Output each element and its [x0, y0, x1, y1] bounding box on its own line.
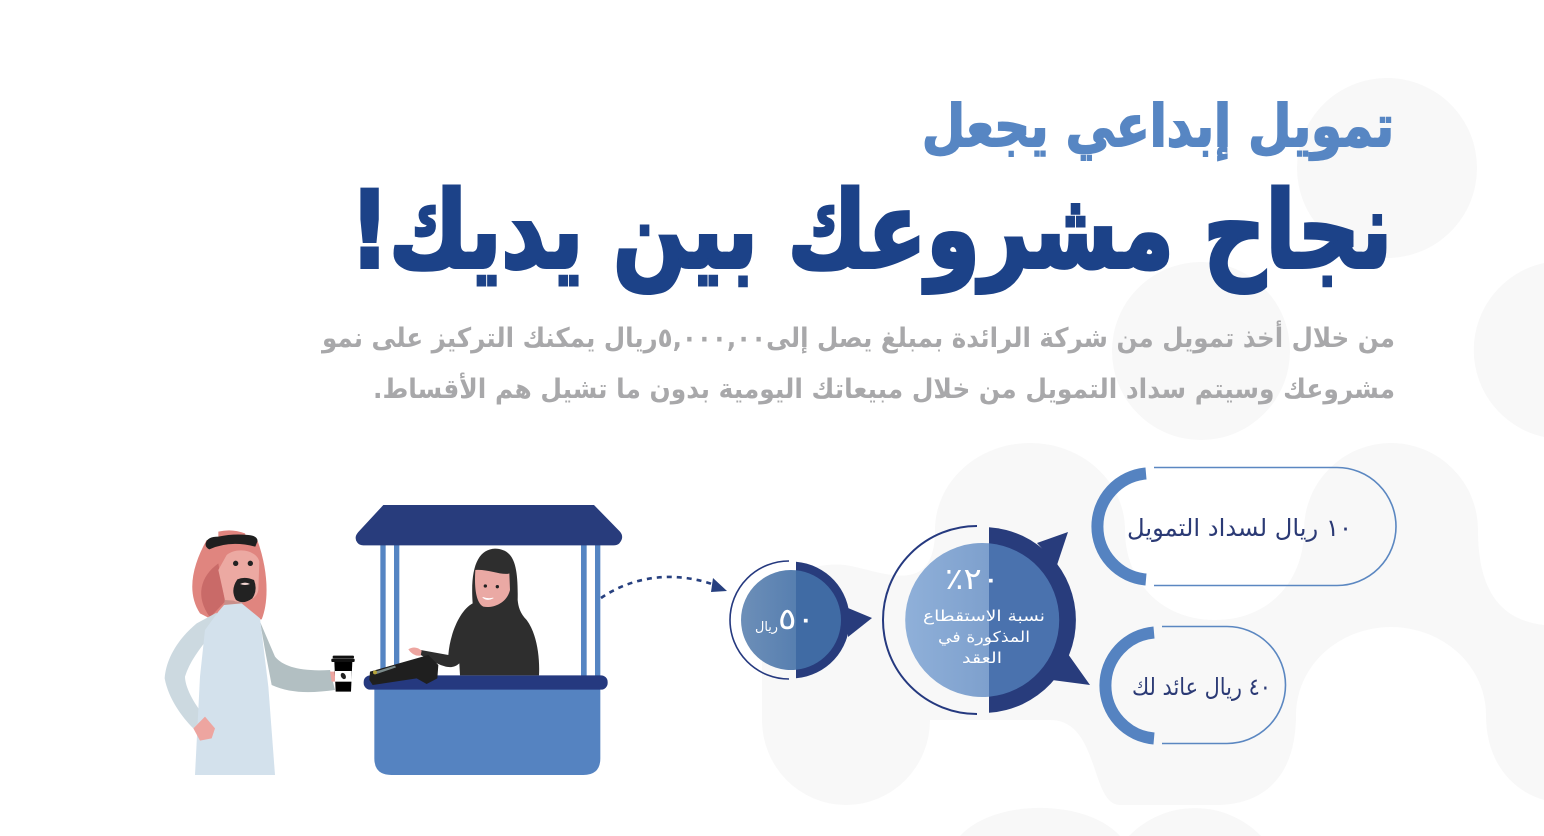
big circle: 20 percent deduction: العقد [962, 649, 1002, 667]
background pattern [762, 78, 1544, 836]
description paragraph: مشروعك وسيتم سداد التمويل من خلال مبيعاتك اليومية بدون ما تشيل هم الأقساط. [373, 372, 1395, 405]
pill: 40 riyals return [1105, 626, 1286, 744]
dotted arrow [601, 577, 727, 598]
pill: 10 riyals for repayment [1097, 468, 1396, 586]
icon: shop assistant [408, 549, 539, 675]
small circle: 50 riyals: ريال [755, 620, 778, 635]
description paragraph: من خلال أخذ تمويل من شركة الرائدة بمبلغ يصل إلى٥,٠٠٠,٠٠ريال يمكنك التركيز على نمو [320, 320, 1395, 354]
big circle: 20 percent deduction: المذكورة في [938, 628, 1030, 647]
description paragraph [320, 320, 1395, 405]
icon: coffee cup [331, 656, 355, 692]
pill: 10 riyals for repayment: ١٠ ريال لسداد التمويل [1127, 514, 1352, 542]
small circle: 50 riyals [730, 561, 872, 679]
title line 1: تمويل إبداعي يجعل [922, 92, 1394, 161]
pill: 40 riyals return: ٤٠ ريال عائد لك [1132, 673, 1271, 701]
small circle: 50 riyals: ٥٠ [778, 602, 815, 637]
illustration: customer and kiosk [165, 505, 622, 775]
big circle: 20 percent deduction: نسبة الاستقطاع [923, 607, 1045, 625]
big circle: 20 percent deduction: ٢٠٪ [945, 562, 1000, 597]
icon: kiosk [356, 505, 622, 775]
big circle: 20 percent deduction [883, 526, 1090, 714]
icon: card payment terminal [369, 655, 438, 685]
icon: customer [165, 530, 335, 775]
